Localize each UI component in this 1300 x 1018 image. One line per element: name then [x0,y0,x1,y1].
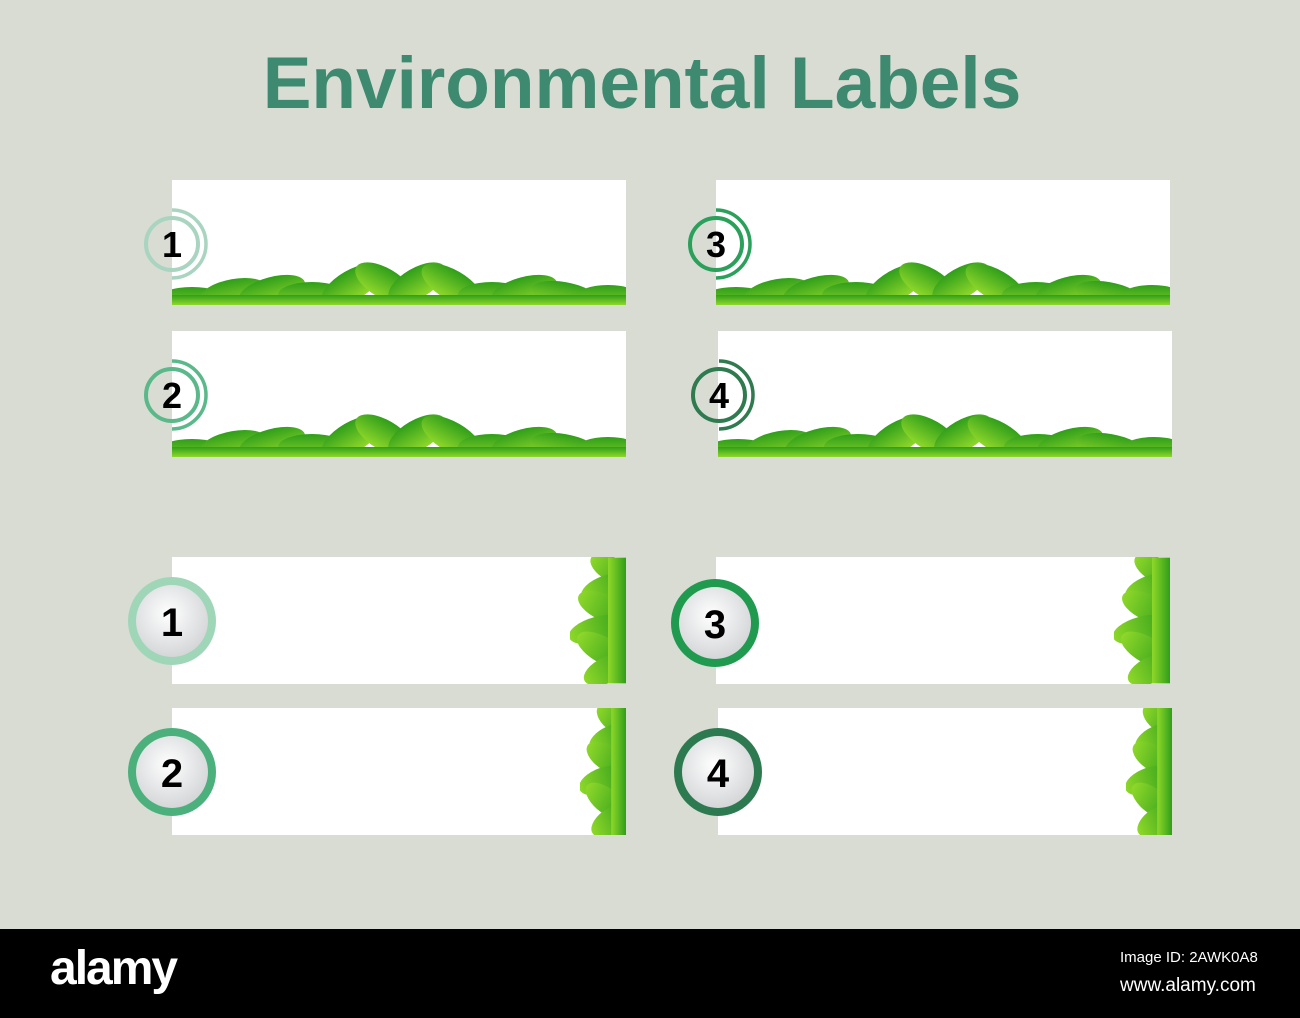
icon: button 2 [128,728,216,816]
icon: number 4 ring [691,359,755,431]
icon: button 3 [671,579,759,667]
icon: number 1 ring: 1 [162,224,182,265]
footer logo: alamy [50,942,176,995]
icon: button 2: 2 [161,752,183,796]
icon: number 3 ring: 3 [706,224,726,265]
panel: top label 1 [172,180,626,305]
icon: number 2 ring [144,359,208,431]
icon: number 1 ring [144,208,208,280]
panel: bottom label 2 [172,708,626,835]
panel: bottom label 4 [718,708,1172,835]
footer url: www.alamy.com [1120,975,1256,996]
icon: button 3: 3 [704,603,726,647]
icon: number 4 ring: 4 [709,375,729,416]
icon: number 2 ring: 2 [162,375,182,416]
icon: button 1 [128,577,216,665]
panel: bottom label 1 [172,557,626,684]
title: Environmental Labels [263,43,1021,124]
footer image id: Image ID: 2AWK0A8 [1120,949,1258,966]
panel: bottom label 3 [716,557,1170,684]
icon: button 4: 4 [707,752,730,796]
icon: number 3 ring [688,208,752,280]
panel: top label 4 [718,331,1172,457]
icon: button 4 [674,728,762,816]
icon: button 1: 1 [161,601,183,645]
panel: top label 3 [716,180,1170,305]
footer bar [0,929,1300,1018]
panel: top label 2 [172,331,626,457]
